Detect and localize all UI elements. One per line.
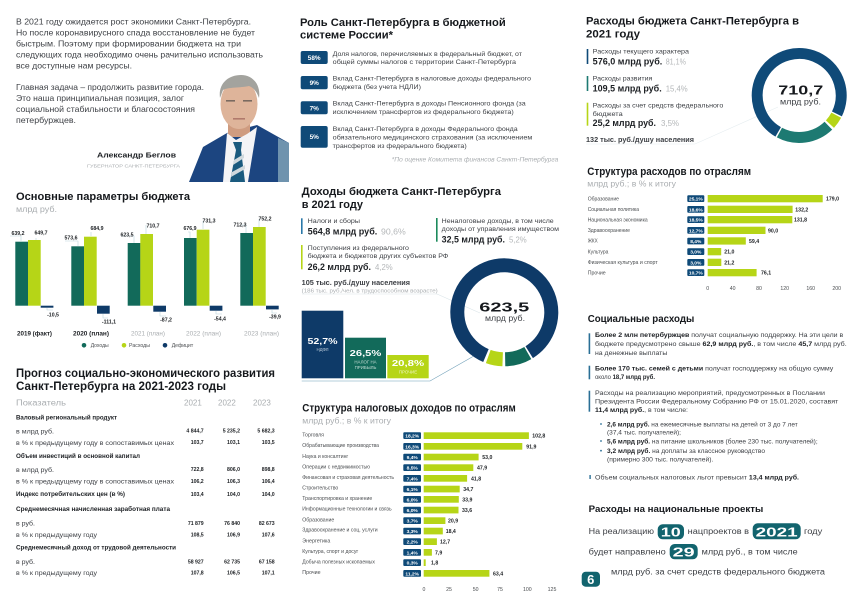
- expense item: development: Расходы развития: [593, 76, 653, 82]
- bar chart: budget parameters by year: 2023 (план): [244, 330, 279, 338]
- bar chart: tax revenue by sector: 25: [446, 587, 452, 593]
- bar chart: tax revenue by sector: 16,3%: [405, 444, 420, 450]
- donut chart: expenses: млрд руб.: [780, 98, 821, 106]
- expense item: federal funds: 25,2 млрд руб.: [593, 118, 656, 128]
- bar chart: expenses by sector: 80: [756, 286, 762, 292]
- heading: tax revenue structure: млрд руб.; в % к итогу: [302, 416, 391, 426]
- bar chart: tax revenue by sector: [302, 432, 556, 593]
- bullet list: social payments: (примерно 300 тыс. получателей).: [607, 456, 714, 463]
- panel: national projects text with number pills: 29: [673, 544, 695, 559]
- table: forecast indicators: 2021: [184, 398, 202, 408]
- bar chart: expenses by sector: 200: [832, 286, 841, 292]
- text block: governor quote: В 2021 году ожидается рост экономики Санкт-Петербурга.: [16, 18, 251, 26]
- bar chart: budget parameters by year: 639,2: [12, 231, 25, 237]
- bar chart: expenses by sector: Культура: [588, 249, 608, 255]
- expense item: development: [587, 76, 688, 94]
- bar chart: expenses by sector: 76,1: [761, 271, 771, 277]
- table: forecast indicators: 106,5: [227, 570, 240, 576]
- donut chart: revenue: 623,5: [479, 300, 529, 315]
- revenue item: federal transfers: Поступления из федерального: [308, 245, 409, 252]
- bar chart: tax revenue by sector: 100: [523, 587, 532, 593]
- panel: role statistics: [301, 50, 559, 163]
- bar blocks: tax revenue composition: 52,7%: [308, 336, 338, 346]
- bullet list: social payments: 2,6 млрд руб. на ежемесячные выплаты на детей от 3 до 7 лет: [607, 421, 798, 428]
- bar chart: tax revenue by sector: 47,9: [477, 466, 487, 472]
- bar chart: tax revenue by sector: 6,0%: [407, 508, 418, 514]
- donut chart: revenue: [440, 248, 569, 377]
- heading: expense structure: млрд руб.; в % к итогу: [587, 180, 676, 188]
- revenue item: federal transfers: [301, 245, 448, 272]
- bar chart: budget parameters by year: -111,1: [102, 320, 116, 326]
- donut chart: revenue: млрд руб.: [485, 314, 525, 323]
- bar chart: expenses by sector: 18,6%: [689, 207, 703, 213]
- bar blocks: tax revenue composition: 20,8%: [392, 358, 425, 368]
- panel: role statistics: 5%: [310, 134, 319, 141]
- bar chart: expenses by sector: 21,0: [724, 250, 735, 256]
- bar chart: tax revenue by sector: 8,5%: [407, 466, 418, 472]
- heading: budget revenue: Доходы бюджета Санкт-Петербурга: [302, 186, 502, 198]
- table: forecast indicators: 58 927: [188, 560, 204, 566]
- table: forecast indicators: в руб.: [16, 520, 35, 528]
- table: forecast indicators: в млрд руб.: [16, 428, 54, 436]
- bar chart: tax revenue by sector: Обрабатывающие производства: [302, 443, 379, 449]
- bar chart: tax revenue by sector: 33,9: [462, 497, 473, 503]
- expense item: federal funds: Расходы за счет средств федерального: [593, 102, 724, 110]
- table: forecast indicators: 62 735: [224, 560, 240, 566]
- panel: role statistics: обязательного медицинского страхования (за исключением: [333, 134, 533, 142]
- revenue item: non-tax income: доходы от управления имуществом: [442, 226, 559, 233]
- bar blocks: tax revenue composition: [302, 311, 473, 381]
- revenue item: federal transfers: 4,2%: [375, 263, 393, 272]
- bar chart: tax revenue by sector: 9,4%: [407, 455, 418, 461]
- panel: role statistics: *По оценке Комитета финансов Санкт-Петербурга: [392, 156, 559, 164]
- table: forecast indicators: Индекс потребительских цен (в %): [16, 491, 125, 498]
- panel: role statistics: 9%: [310, 80, 319, 87]
- bar chart: budget parameters by year: 623,5: [121, 233, 134, 239]
- table: forecast indicators: 107,6: [262, 532, 275, 538]
- table: forecast indicators: [16, 398, 275, 577]
- panel: role statistics: трансфертов из федерального бюджета): [333, 142, 467, 150]
- bullet list: social payments: 3,2 млрд руб. на доплаты за классное руководство: [607, 448, 766, 455]
- bar chart: tax revenue by sector: 18,4: [446, 529, 456, 535]
- per capita expense note: [586, 107, 778, 144]
- table: forecast indicators: Показатель: [16, 398, 66, 408]
- panel: role statistics: общей суммы налогов с территории Санкт-Петербурга: [333, 58, 516, 66]
- bar chart: expenses by sector: 59,4: [749, 239, 759, 245]
- table: forecast indicators: Объем инвестиций в основной капитал: [16, 453, 140, 460]
- table: forecast indicators: 107,1: [262, 570, 275, 576]
- revenue item: federal transfers: 26,2 млрд руб.: [308, 262, 371, 272]
- bar chart: expenses by sector: Здравоохранение: [588, 228, 630, 234]
- heading: tax revenue structure: Структура налоговых доходов по отраслям: [302, 402, 516, 414]
- governor name and title: ГУБЕРНАТОР САНКТ-ПЕТЕРБУРГА: [87, 164, 181, 168]
- text block: governor quote: быстрым. Поэтому при формировании бюджета на три: [16, 40, 241, 48]
- text block: presidential address measures: [589, 389, 838, 414]
- heading: budget expenses: Расходы бюджета Санкт-Петербурга в: [586, 16, 799, 28]
- panel: role statistics: Вклад Санкт-Петербурга в налоговые доходы федерального: [333, 74, 531, 82]
- heading: social expenses: Социальные расходы: [588, 314, 694, 325]
- heading: main budget parameters: [16, 191, 191, 214]
- chart legend: [82, 343, 194, 349]
- text block: presidential address measures: Расходы на реализацию мероприятий, предусмотренных в Послании: [595, 389, 825, 397]
- text block: presidential address measures: 11,4 млрд руб. , в том числе:: [595, 406, 688, 414]
- panel: national projects text with number pills: млрд руб., в том числе: [702, 547, 798, 556]
- per capita revenue note: 105 тыс. руб./душу населения: [302, 279, 410, 287]
- bar chart: budget parameters by year: 684,9: [91, 226, 104, 232]
- bar blocks: tax revenue composition: НАЛОГ НА: [354, 360, 377, 364]
- bullet list: social payments: 5,6 млрд руб. на питание школьников (более 230 тыс. получателей);: [607, 438, 818, 445]
- bar chart: expenses by sector: Образование: [588, 196, 619, 202]
- bar blocks: tax revenue composition: 26,5%: [350, 348, 382, 358]
- bar chart: budget parameters by year: -39,9: [269, 315, 281, 321]
- table: forecast indicators: Среднемесячная начисленная заработная плата: [16, 506, 171, 513]
- heading: expense structure: [587, 166, 751, 188]
- heading: budget revenue: в 2021 году: [302, 199, 364, 211]
- bar chart: tax revenue by sector: 7,9: [435, 550, 442, 556]
- bar chart: budget parameters by year: 2020 (план): [73, 330, 109, 338]
- table: forecast indicators: 76 840: [224, 521, 240, 527]
- per capita revenue note: [302, 279, 480, 313]
- bar chart: tax revenue by sector: 125: [548, 587, 556, 593]
- bar chart: tax revenue by sector: Здравоохранение и соц. услуги: [302, 528, 378, 534]
- bar chart: tax revenue by sector: Финансовая и страховая деятельность: [302, 475, 394, 481]
- heading: budget expenses: 2021 году: [586, 28, 641, 40]
- table: forecast indicators: в % к предыдущему году: [16, 532, 98, 539]
- bar chart: tax revenue by sector: 20,9: [448, 519, 458, 525]
- bar chart: expenses by sector: 25,1%: [689, 197, 703, 203]
- bar chart: tax revenue by sector: 41,8: [471, 476, 481, 482]
- bar chart: expenses by sector: 10,7%: [689, 271, 703, 277]
- heading: main budget parameters: млрд руб.: [16, 205, 57, 214]
- bar blocks: tax revenue composition: НДФЛ: [316, 347, 329, 352]
- bar chart: budget parameters by year: 2021 (план): [131, 330, 165, 338]
- text block: social support: бюджете предусмотрено свыше 62,9 млрд руб. , в том числе 45,7 млрд руб.: [595, 340, 847, 348]
- panel: role statistics: Вклад Санкт-Петербурга в доходы Пенсионного фонда (за: [333, 100, 526, 108]
- chart legend: Дефицит: [172, 343, 194, 349]
- revenue item: taxes: Налоги и сборы: [308, 217, 360, 225]
- bullet list: social payments: [600, 421, 818, 463]
- bar chart: tax revenue by sector: 0: [423, 587, 426, 593]
- bar chart: tax revenue by sector: Строительство: [302, 486, 338, 492]
- text block: governor quote: Это наша принципиальная позиция, залог: [16, 94, 184, 103]
- bar chart: expenses by sector: Прочие: [588, 270, 606, 276]
- table: forecast indicators: 104,0: [262, 492, 275, 498]
- revenue item: taxes: [301, 217, 406, 236]
- panel: role statistics: 7%: [310, 105, 319, 112]
- bar chart: tax revenue by sector: 2,2%: [407, 540, 418, 546]
- table: forecast indicators: 104,0: [227, 492, 240, 498]
- portrait of Alexander Beglov: [189, 75, 289, 182]
- bar chart: tax revenue by sector: 102,8: [532, 434, 545, 440]
- bar chart: tax revenue by sector: 53,0: [482, 455, 493, 461]
- text block: families with children: [589, 364, 834, 381]
- panel: national projects text with number pills: нацпроектов в: [688, 527, 749, 536]
- bar chart: tax revenue by sector: 0,3%: [407, 561, 418, 567]
- bar chart: budget parameters by year: -54,4: [214, 316, 226, 322]
- heading: forecast: [16, 367, 275, 393]
- expense item: development: 15,4%: [666, 84, 688, 94]
- revenue item: non-tax income: 5,2%: [509, 236, 527, 244]
- chart legend: Доходы: [91, 343, 109, 349]
- panel: national projects text with number pills: 6: [587, 572, 594, 587]
- bar chart: tax revenue by sector: 33,6: [462, 508, 472, 514]
- expense item: federal funds: бюджета: [593, 110, 623, 118]
- table: forecast indicators: 108,5: [191, 532, 204, 538]
- text block: social support: на денежные выплаты: [595, 350, 667, 357]
- bar blocks: tax revenue composition: ПРОЧИЕ: [399, 370, 417, 374]
- expense item: development: 109,5 млрд руб.: [593, 84, 662, 94]
- bar chart: expenses by sector: 179,0: [826, 197, 839, 203]
- panel: national projects text with number pills: году: [804, 527, 822, 536]
- bar chart: tax revenue by sector: 1,4%: [407, 550, 418, 556]
- bar chart: budget parameters by year: 2019 (факт): [17, 330, 52, 338]
- bar chart: budget parameters by year: 649,7: [35, 231, 48, 237]
- chart legend: Расходы: [129, 343, 150, 349]
- revenue item: taxes: 564,8 млрд руб.: [308, 226, 377, 236]
- donut chart: expenses: [740, 36, 859, 155]
- panel: role statistics: Доля налогов, перечисляемых в федеральный бюджет, от: [333, 50, 522, 58]
- bar chart: expenses by sector: [588, 195, 841, 292]
- bar chart: expenses by sector: 18,5%: [689, 218, 703, 224]
- bar chart: expenses by sector: 3,0%: [690, 250, 702, 256]
- bar chart: budget parameters by year: 2022 (план): [186, 330, 221, 338]
- text block: presidential address measures: Президента России Федеральному Собранию РФ от 15.01.2020, составят: [595, 398, 838, 406]
- bar chart: tax revenue by sector: 34,7: [463, 487, 474, 493]
- table: forecast indicators: в руб.: [16, 558, 35, 566]
- bar chart: tax revenue by sector: 18,2%: [405, 434, 420, 440]
- table: forecast indicators: 67 158: [259, 560, 275, 566]
- bar chart: expenses by sector: ЖКХ: [588, 239, 598, 245]
- table: forecast indicators: 5 235,2: [223, 428, 240, 434]
- bar chart: budget parameters by year: 710,7: [147, 224, 160, 230]
- bar chart: tax revenue by sector: Добыча полезных ископаемых: [302, 559, 375, 565]
- expense item: federal funds: [587, 102, 724, 128]
- heading: forecast: Прогноз социально-экономического развития: [16, 367, 275, 380]
- heading: budget expenses: [586, 16, 799, 40]
- panel: national projects text with number pills: [582, 523, 826, 587]
- panel: role statistics: 58%: [308, 55, 321, 62]
- table: forecast indicators: 4 844,7: [186, 428, 204, 434]
- bar chart: budget parameters by year: 573,6: [65, 236, 78, 242]
- table: forecast indicators: в % к предыдущему году: [16, 570, 98, 577]
- table: forecast indicators: 103,7: [191, 440, 204, 446]
- table: forecast indicators: 106,2: [191, 479, 204, 485]
- heading: national projects: Расходы на национальные проекты: [589, 504, 763, 515]
- table: forecast indicators: в млрд руб.: [16, 466, 54, 474]
- text block: social tax benefits: Объем социальных налоговых льгот превысит 13,4 млрд руб.: [595, 473, 799, 481]
- table: forecast indicators: 106,9: [227, 532, 240, 538]
- bar chart: expenses by sector: 90,0: [768, 228, 778, 234]
- table: forecast indicators: Среднемесячный доход от трудовой деятельности: [16, 544, 176, 552]
- table: forecast indicators: в % к предыдущему году в сопоставимых ценах: [16, 478, 175, 486]
- bar chart: tax revenue by sector: Культура, спорт и досуг: [302, 549, 358, 555]
- text block: families with children: около 18,7 млрд руб.: [595, 373, 655, 381]
- bar chart: tax revenue by sector: 6,1%: [407, 487, 418, 493]
- bar chart: expenses by sector: 132,2: [795, 207, 808, 213]
- bar blocks: tax revenue composition: ПРИБЫЛЬ: [355, 365, 376, 370]
- panel: national projects text with number pills: будет направлено: [589, 547, 666, 556]
- table: forecast indicators: 107,8: [191, 570, 204, 576]
- table: forecast indicators: 898,8: [262, 467, 275, 473]
- panel: national projects text with number pills: 2021: [756, 524, 798, 539]
- expense item: current: Расходы текущего характера: [593, 48, 689, 56]
- bar chart: expenses by sector: 3,0%: [690, 260, 702, 266]
- bar chart: tax revenue by sector: Информационные технологии и связь: [302, 507, 392, 513]
- table: forecast indicators: 2022: [218, 398, 236, 408]
- bar chart: expenses by sector: Национальная экономика: [588, 218, 648, 224]
- bar chart: budget parameters by year: 731,3: [203, 219, 216, 225]
- heading: main budget parameters: Основные параметры бюджета: [16, 191, 191, 203]
- heading: role of St Petersburg: системе России*: [300, 30, 394, 42]
- bar chart: expenses by sector: 160: [806, 286, 815, 292]
- bar chart: tax revenue by sector: 50: [473, 587, 479, 593]
- panel: role statistics: Вклад Санкт-Петербурга в доходы Федерального фонда: [333, 125, 518, 133]
- expense item: current: 81,1%: [666, 58, 686, 66]
- bar chart: tax revenue by sector: 3,3%: [407, 529, 418, 535]
- panel: national projects text with number pills: 10: [661, 524, 681, 539]
- expense item: federal funds: 3,5%: [661, 119, 679, 128]
- bar chart: tax revenue by sector: 1,8: [431, 561, 438, 567]
- bar chart: tax revenue by sector: 12,7: [440, 540, 450, 546]
- text block: governor quote: Но после коронавирусного спада восстановление не будет: [16, 28, 255, 38]
- table: forecast indicators: Валовый региональный продукт: [16, 414, 117, 422]
- bar chart: tax revenue by sector: Транспортировка и хранение: [302, 496, 372, 502]
- text block: social support: Более 2 млн петербуржцев получат социальную поддержку. На эти цели в: [595, 331, 844, 339]
- table: forecast indicators: 103,5: [262, 440, 275, 446]
- revenue item: federal transfers: бюджета и бюджетов других субъектов РФ: [308, 252, 448, 260]
- bar chart: tax revenue by sector: 6,0%: [407, 497, 418, 503]
- text block: governor quote: [16, 18, 263, 125]
- governor name and title: Александр Беглов: [97, 150, 177, 160]
- text block: governor quote: Главная задача – продолжить развитие города.: [16, 83, 204, 92]
- bar chart: tax revenue by sector: 91,9: [526, 444, 537, 450]
- bar chart: expenses by sector: Физическая культура и спорт: [588, 260, 658, 266]
- bar chart: tax revenue by sector: Энергетика: [302, 538, 330, 544]
- bullet list: social payments: (37,4 тыс. получателей);: [607, 430, 681, 437]
- bar chart: expenses by sector: Социальная политика: [588, 207, 639, 213]
- expense item: current: 576,0 млрд руб.: [593, 56, 662, 66]
- text block: social support: [589, 331, 847, 357]
- bar chart: expenses by sector: 21,2: [724, 260, 735, 266]
- bar chart: expenses by sector: 131,8: [794, 218, 807, 224]
- text block: governor quote: петербуржцев.: [16, 116, 76, 125]
- bar chart: budget parameters by year: [10, 217, 281, 338]
- expense item: current: [587, 48, 689, 66]
- bar chart: tax revenue by sector: 63,4: [493, 571, 503, 577]
- revenue item: non-tax income: [436, 218, 559, 244]
- bar chart: tax revenue by sector: 3,7%: [407, 519, 418, 525]
- bar chart: budget parameters by year: 676,9: [184, 226, 197, 232]
- text block: governor quote: все доступные нам ресурсы.: [16, 62, 132, 70]
- heading: role of St Petersburg: Роль Санкт-Петербурга в бюджетной: [300, 17, 506, 29]
- text block: governor quote: следующих года необходимо очень рачительно использовать: [16, 50, 263, 60]
- revenue item: non-tax income: Неналоговые доходы, в том числе: [442, 218, 554, 225]
- bar chart: budget parameters by year: -10,5: [47, 313, 59, 319]
- bar chart: budget parameters by year: 752,2: [259, 217, 272, 223]
- bar chart: expenses by sector: 12,7%: [689, 228, 703, 234]
- table: forecast indicators: 722,8: [191, 467, 204, 473]
- heading: role of St Petersburg: [300, 17, 506, 42]
- bar chart: expenses by sector: 40: [730, 286, 736, 292]
- text block: families with children: Более 170 тыс. семей с детьми получат господдержку на общую сумму: [595, 364, 834, 372]
- bar chart: tax revenue by sector: Торговля: [302, 432, 324, 438]
- table: forecast indicators: 103,1: [227, 440, 240, 446]
- donut chart: expenses: 710,7: [778, 82, 823, 98]
- bar chart: tax revenue by sector: Прочие: [302, 570, 321, 576]
- bar chart: expenses by sector: 8,4%: [690, 239, 702, 245]
- table: forecast indicators: в % к предыдущему году в сопоставимых ценах: [16, 440, 175, 447]
- per capita expense note: 132 тыс. руб./душу населения: [586, 136, 694, 144]
- heading: forecast: Санкт-Петербурга на 2021-2023 годы: [16, 380, 226, 393]
- bar chart: tax revenue by sector: 75: [497, 587, 503, 593]
- table: forecast indicators: 103,4: [191, 492, 204, 498]
- bar chart: tax revenue by sector: 7,4%: [407, 476, 418, 482]
- panel: role statistics: исключением трансфертов из федерального бюджета): [333, 108, 514, 116]
- table: forecast indicators: 2023: [253, 398, 271, 408]
- text block: governor quote: социальной стабильности и благосостояния: [16, 105, 195, 114]
- table: forecast indicators: 71 879: [188, 521, 204, 527]
- bar chart: tax revenue by sector: Наука и консалтинг: [302, 454, 348, 460]
- heading: budget revenue: [302, 186, 502, 211]
- bar chart: expenses by sector: 0: [706, 286, 709, 292]
- table: forecast indicators: 106,3: [227, 479, 240, 485]
- bar chart: tax revenue by sector: Образование: [302, 517, 334, 523]
- panel: national projects text with number pills: На реализацию: [589, 527, 654, 536]
- bar chart: tax revenue by sector: 11,2%: [405, 571, 420, 577]
- bar chart: budget parameters by year: 712,3: [234, 223, 247, 229]
- governor name and title: [87, 150, 181, 168]
- per capita revenue note: (186 тыс. руб./чел. в трудоспособном возрасте): [302, 288, 438, 294]
- bar chart: tax revenue by sector: Операции с недвижимостью: [302, 464, 370, 470]
- revenue item: taxes: 90,6%: [381, 228, 406, 236]
- table: forecast indicators: 82 673: [259, 521, 275, 527]
- heading: expense structure: Структура расходов по отраслям: [587, 166, 751, 178]
- heading: tax revenue structure: [302, 402, 516, 426]
- revenue item: non-tax income: 32,5 млрд руб.: [442, 234, 505, 244]
- bar chart: expenses by sector: 120: [780, 286, 789, 292]
- table: forecast indicators: 806,0: [227, 467, 240, 473]
- bar chart: budget parameters by year: -87,2: [160, 318, 172, 324]
- panel: role statistics: бюджета (без учета НДЛИ): [333, 83, 421, 91]
- table: forecast indicators: 5 682,3: [257, 428, 275, 434]
- table: forecast indicators: 106,4: [262, 479, 275, 485]
- panel: national projects text with number pills: млрд руб. за счет средств федерального бюджета: [611, 567, 826, 576]
